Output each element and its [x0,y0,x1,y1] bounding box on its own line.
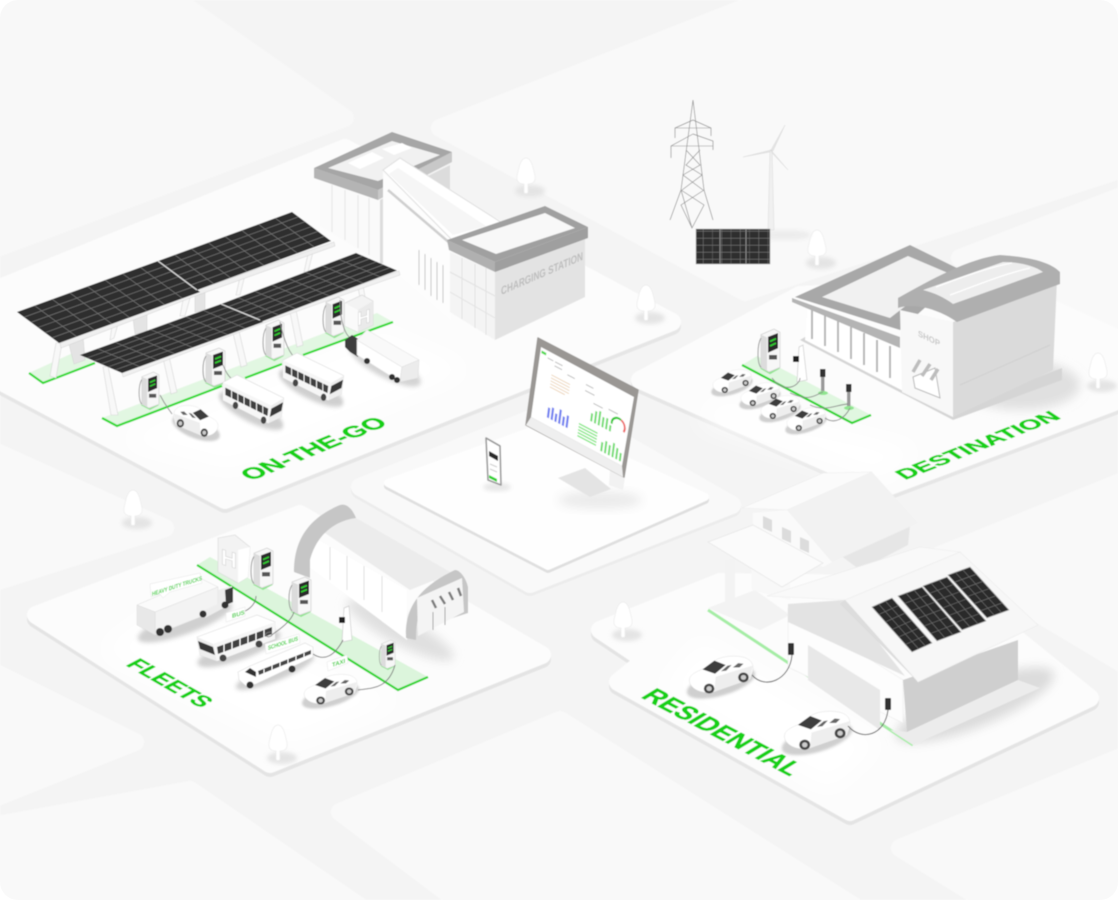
dashboard charts [533,350,629,461]
car: on-the-go [172,408,221,442]
monitor with dashboard [526,338,642,509]
green charging strip: destination [742,356,871,423]
bus: on-the-go [218,375,284,432]
title: destination: DESTINATION [890,409,1066,483]
tree [612,602,642,641]
taxi: fleets [299,674,362,714]
site plate: destination [632,356,1118,498]
tag: taxi [327,655,348,671]
rooftop solar panels [872,598,932,652]
main roof [788,600,905,676]
energy sources: solar panel [696,229,770,264]
tag: taxi: TAXI [332,658,345,669]
canopy supports [50,252,365,415]
chargers: on-the-go [139,297,352,414]
school bus: fleets [233,643,317,696]
back wing [840,525,910,570]
chargers: fleets [251,548,395,670]
site plate: central platform [384,428,709,573]
solar canopy: front row [80,253,400,377]
text: charging station sign: CHARGING STATION [501,249,583,298]
tree [516,181,544,196]
green charging strip: fleets [197,557,428,690]
house: residential [708,472,1062,757]
wallboxes [788,643,794,655]
bus: on-the-go [278,353,344,409]
glow on plates [710,422,765,446]
cars: destination [710,372,827,436]
tree [635,285,665,324]
chargers: destination [758,329,854,410]
solar canopy: back row [17,212,335,348]
site plate: fleets [27,598,551,777]
text: shop sign: SHOP [918,328,940,348]
tag: heavy duty trucks: HEAVY DUTY TRUCKS [152,575,202,598]
building: hangar [294,505,468,671]
charging cables: fleets [242,596,395,690]
truck: on-the-go [344,330,422,388]
building: charging station [314,132,588,340]
truck: heavy duty trucks [134,578,236,650]
main house walls [788,608,903,723]
site plate: on-the-go [0,326,680,513]
tag: school bus: SCHOOL BUS [268,636,298,652]
tag: school bus [265,634,300,654]
tree [806,256,836,270]
energy storage cabinet: on-the-go: H [357,305,371,331]
energy storage cabinet: fleets [218,535,250,583]
phone [483,438,511,491]
bus: fleets [194,615,284,674]
green ground strip [708,610,913,745]
site plate: residential [591,634,1099,825]
energy storage cabinet: fleets: H [221,544,237,574]
tag: bus: BUS [232,609,245,620]
tree [1087,378,1117,393]
energy sources: wind turbine [743,125,811,240]
cars: residential [683,656,856,762]
title: on-the-go: ON-THE-GO [234,413,393,484]
green charging strips: on-the-go [29,313,393,426]
tree [122,490,152,529]
charging cables: residential [752,655,888,735]
energy storage cabinet: on-the-go [345,295,373,332]
title: residential: RESIDENTIAL [635,685,810,780]
tree [267,725,297,764]
tag: bus [226,607,245,622]
charging cables: destination [772,378,850,421]
building: shop [792,245,1080,420]
energy sources: pylon [670,100,713,228]
title: fleets: FLEETS [120,656,219,711]
tag: heavy duty trucks [150,573,202,598]
